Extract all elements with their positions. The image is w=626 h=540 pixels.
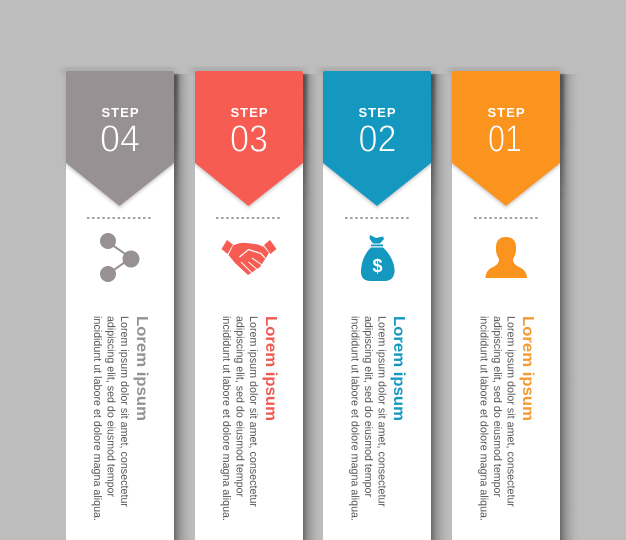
- body text: [478, 316, 516, 521]
- panel: step 03: [191, 67, 323, 540]
- body text: adipiscing elit, sed do eiusmod tempor: [104, 316, 116, 497]
- body text: Lorem ipsum dolor sit amet, consectetur: [247, 316, 259, 507]
- body text: [220, 316, 259, 521]
- panel: step 01: [448, 67, 582, 540]
- panel: step 02: [319, 67, 452, 540]
- icon: money bag: [361, 235, 395, 281]
- title: Lorem ipsum: [133, 316, 150, 421]
- body text: adipiscing elit, sed do eiusmod tempor: [234, 316, 246, 497]
- body text: incididunt ut labore et dolore magna aliqua.: [478, 316, 490, 521]
- icon: money bag: $: [372, 256, 383, 276]
- step number: 01: [488, 118, 522, 160]
- icon: share network: [100, 233, 140, 282]
- banner: [66, 71, 174, 206]
- step label: STEP: [488, 105, 525, 120]
- banner: [323, 71, 431, 206]
- step label: STEP: [102, 105, 139, 120]
- step number: 03: [230, 118, 268, 160]
- body text: incididunt ut labore et dolore magna aliqua.: [91, 316, 103, 521]
- icon: person: [486, 237, 527, 278]
- body text: Lorem ipsum dolor sit amet, consectetur: [118, 316, 130, 507]
- body text: adipiscing elit, sed do eiusmod tempor: [362, 316, 374, 497]
- body text: adipiscing elit, sed do eiusmod tempor: [491, 316, 503, 497]
- step label: STEP: [230, 105, 268, 120]
- panel: step 04: [62, 67, 195, 540]
- icon: handshake: [222, 240, 276, 275]
- body text: [348, 316, 388, 521]
- body text: incididunt ut labore et dolore magna aliqua.: [220, 316, 232, 521]
- step label: STEP: [358, 105, 396, 120]
- body text: incididunt ut labore et dolore magna aliqua.: [348, 316, 360, 521]
- step number: 04: [100, 118, 140, 160]
- step number: 02: [358, 118, 396, 160]
- banner: [452, 71, 560, 206]
- body text: Lorem ipsum dolor sit amet, consectetur: [376, 316, 388, 507]
- title: Lorem ipsum: [390, 316, 407, 421]
- body text: Lorem ipsum dolor sit amet, consectetur: [504, 316, 516, 507]
- title: Lorem ipsum: [519, 316, 536, 421]
- body text: [91, 316, 130, 521]
- banner: [195, 71, 303, 206]
- title: Lorem ipsum: [262, 316, 279, 421]
